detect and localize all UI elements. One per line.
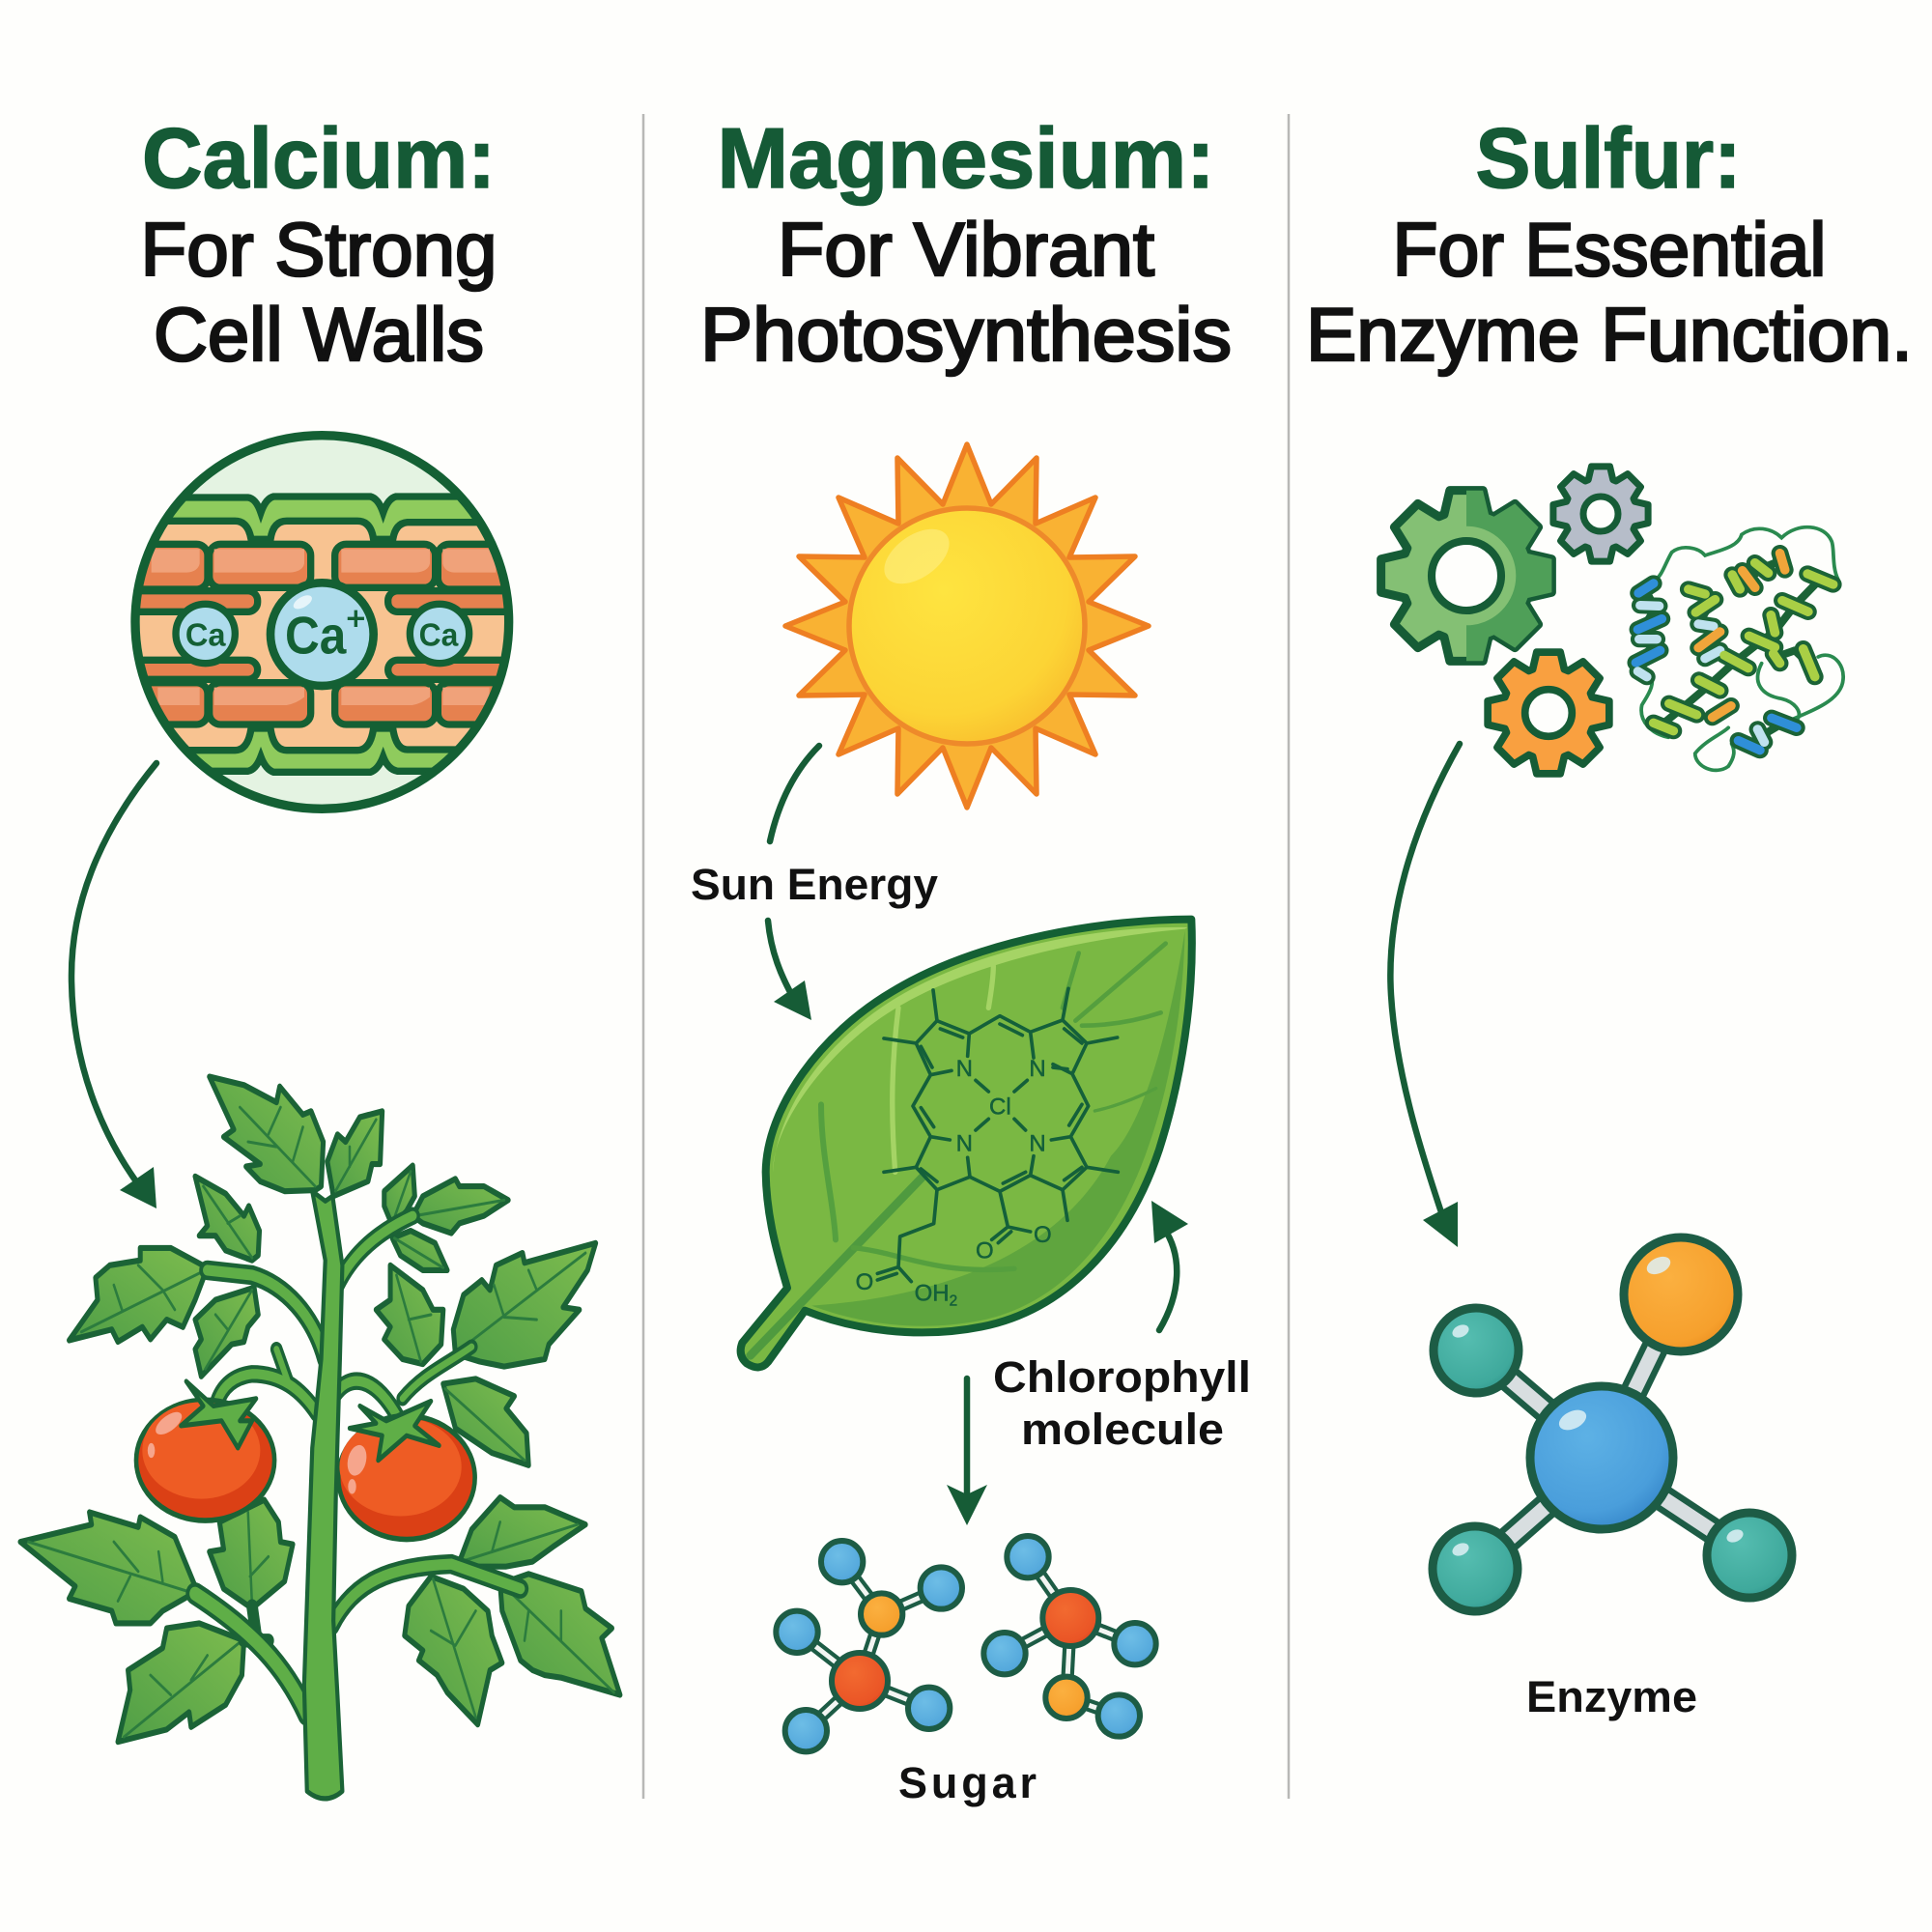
heading: calcium: Cell Walls xyxy=(154,292,484,377)
chlorophyll structure: OH xyxy=(915,1281,950,1307)
label: chlorophyll molecule: molecule xyxy=(1021,1405,1224,1454)
heading: sulfur: Enzyme Function. xyxy=(1306,292,1913,377)
icon: enzyme molecule xyxy=(1433,1237,1792,1611)
icon: sun xyxy=(785,444,1149,808)
ion: large Ca+ xyxy=(270,582,374,686)
heading: magnesium: For Vibrant xyxy=(778,207,1154,292)
bonds xyxy=(797,1557,1135,1731)
illustration: tomato plant xyxy=(20,1077,620,1799)
panel: sulfur xyxy=(1306,110,1913,1721)
chlorophyll structure xyxy=(856,988,1118,1309)
label: sun energy: Sun Energy xyxy=(691,860,938,909)
heading: sulfur: For Essential xyxy=(1393,207,1826,292)
bonds xyxy=(1475,1294,1749,1569)
ion: large Ca+: Ca xyxy=(285,606,347,666)
ion: right Ca: Ca xyxy=(419,617,459,653)
ion: right Ca xyxy=(410,604,469,664)
helix colors xyxy=(1635,554,1833,751)
chlorophyll structure: O xyxy=(856,1269,873,1295)
heading: magnesium xyxy=(700,110,1232,377)
ion: left Ca: Ca xyxy=(185,617,226,653)
icon: sugar molecules xyxy=(776,1536,1156,1751)
icon: gray gear xyxy=(1553,467,1648,561)
leaf blade xyxy=(741,920,1192,1367)
heading: calcium xyxy=(141,110,497,377)
chlorophyll structure: O xyxy=(1034,1222,1052,1248)
loops xyxy=(1641,527,1843,770)
panel: calcium xyxy=(20,110,620,1799)
heading: sulfur: Sulfur: xyxy=(1476,110,1741,206)
tomato: left xyxy=(136,1381,274,1520)
atoms xyxy=(776,1536,1156,1751)
arrow: label to leaf xyxy=(768,921,811,1020)
icon: orange gear xyxy=(1488,652,1609,774)
arrow: sun to label xyxy=(770,746,819,841)
helix block outlines xyxy=(1635,554,1833,751)
leaves xyxy=(20,1077,620,1742)
chlorophyll structure: 2 xyxy=(950,1293,957,1309)
label: sugar: Sugar xyxy=(898,1758,1037,1807)
atoms xyxy=(1433,1237,1792,1611)
heading: calcium: For Strong xyxy=(141,207,497,292)
heading: sulfur xyxy=(1306,110,1913,377)
chlorophyll structure: N xyxy=(956,1056,973,1082)
chlorophyll structure: O xyxy=(976,1238,994,1264)
ion: left Ca xyxy=(176,604,235,664)
label: enzyme: Enzyme xyxy=(1526,1672,1697,1721)
outer ring xyxy=(135,436,509,809)
illustration: leaf with chlorophyll molecule xyxy=(741,920,1192,1367)
chlorophyll structure: Cl xyxy=(989,1094,1011,1120)
arrow: cell wall to plant xyxy=(71,763,156,1208)
heading: magnesium: Photosynthesis xyxy=(700,292,1232,377)
arrow: up to leaf xyxy=(1151,1201,1188,1330)
arrow: down to sugar xyxy=(947,1378,987,1525)
chlorophyll structure: N xyxy=(956,1131,973,1157)
heading: calcium: Calcium: xyxy=(142,110,496,206)
helix spines xyxy=(1642,560,1820,746)
icon: protein ribbon xyxy=(1635,527,1843,770)
chlorophyll structure: N xyxy=(1029,1131,1046,1157)
arrow: enzyme path xyxy=(1390,744,1460,1247)
label: chlorophyll molecule: Chlorophyll xyxy=(993,1352,1251,1402)
heading: magnesium: Magnesium: xyxy=(717,110,1215,206)
label: chlorophyll molecule xyxy=(993,1352,1251,1454)
stem and branches xyxy=(195,1191,521,1799)
tomato: right xyxy=(338,1401,475,1540)
panel: magnesium xyxy=(691,110,1251,1807)
icon: cell wall circle with calcium ions xyxy=(130,431,514,813)
veins xyxy=(751,944,1166,1355)
ion: large Ca+: + xyxy=(347,602,365,638)
icon: green gear xyxy=(1381,491,1551,661)
chlorophyll structure: N xyxy=(1029,1056,1046,1082)
